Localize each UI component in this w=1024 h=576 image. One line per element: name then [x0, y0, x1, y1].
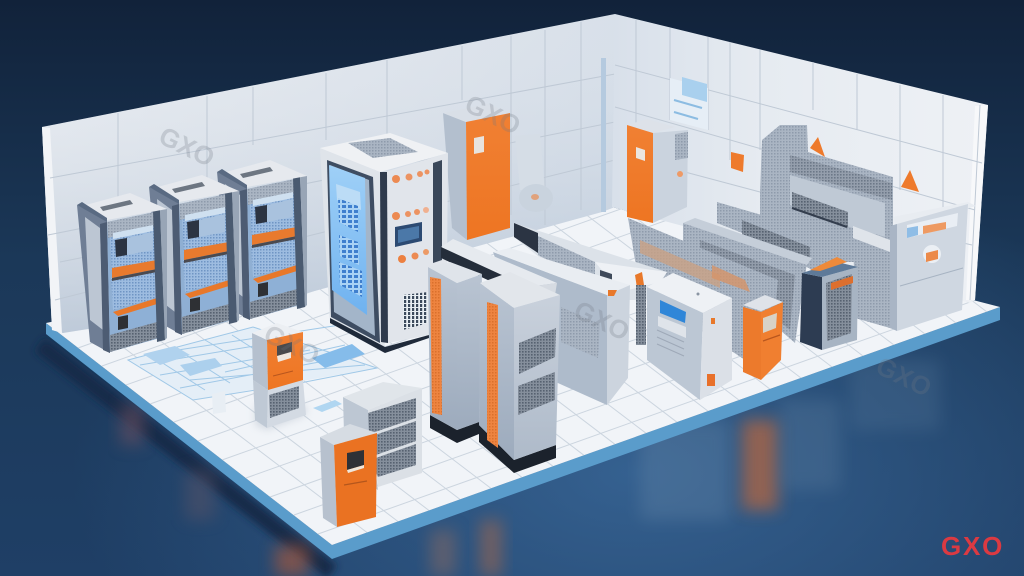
floor [46, 208, 1000, 545]
server rack 3 [217, 160, 307, 320]
sign: warning triangle 1 [810, 137, 825, 157]
wall chart [670, 77, 708, 130]
right wall [612, 14, 988, 303]
tower left [428, 262, 482, 443]
sign: warning triangle 2 [901, 170, 919, 192]
pipe on wall [601, 58, 606, 212]
left wall [42, 14, 615, 333]
sign: orange square [731, 152, 744, 172]
orange small cabinet right [743, 295, 783, 380]
small orange cabinet on blueprint [252, 323, 306, 430]
wall mounted unit [515, 134, 553, 212]
orange cabinet corner [627, 119, 688, 223]
floor air unit [343, 382, 422, 490]
black beam unit [441, 239, 557, 299]
low unit with black end [514, 223, 667, 345]
front orange cabinet [320, 424, 377, 527]
mesh row middle [683, 218, 812, 343]
floor slab edge [46, 307, 1000, 559]
orange cabinet back [443, 104, 510, 240]
large white unit right [853, 202, 976, 331]
large mesh unit back [760, 125, 893, 262]
mesh row front [628, 218, 778, 360]
mesh row back [717, 202, 837, 270]
floor blueprint [128, 325, 377, 414]
watermarks: GXO [259, 318, 324, 371]
watermarks: GXO [154, 120, 219, 173]
logo: GXO: GXO [941, 531, 1004, 561]
tower right [479, 272, 560, 473]
watermarks: GXO [460, 88, 525, 141]
dark mesh cabinet [800, 257, 858, 350]
white screen box [647, 273, 732, 400]
watermarks [154, 88, 936, 403]
watermarks: GXO [569, 294, 634, 347]
server rack 2 [149, 175, 239, 335]
long low cabinet [493, 248, 630, 405]
watermarks: GXO [871, 350, 936, 403]
server rack 1 [77, 193, 167, 353]
tall screen cabinet [320, 133, 448, 353]
